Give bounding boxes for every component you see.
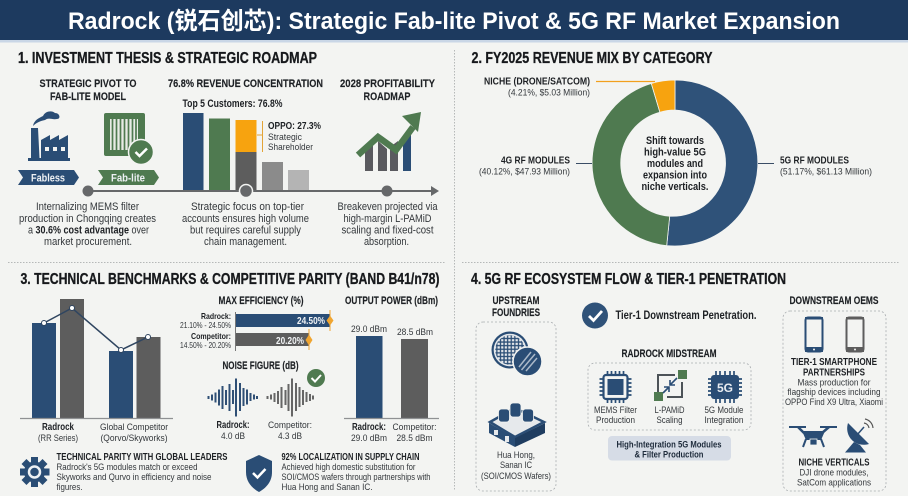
chart: noise figure: NOISE FIGURE (dB) [222,360,299,372]
chart: noise figure: 4.0 dB [221,431,245,442]
column: Radrock midstream [588,348,751,430]
heading: section 3: 3. TECHNICAL BENCHMARKS & COMPETITIVE PARITY (BAND B41/n78) [20,271,440,288]
label: niche: (4.21%, $5.03 Million) [508,88,590,98]
chart: noise figure: 4.3 dB [278,431,302,442]
chart: max efficiency: 21.10% - 24.50% [180,321,231,330]
donut chart [592,80,758,246]
column: downstream OEMs: DJI drone modules, [800,468,868,478]
callout: tier-1 penetration [582,302,756,328]
icon: factory [28,111,70,161]
callout: technical parity [56,452,228,493]
callout: OPPO share [257,121,321,153]
donut centre text: modules and [647,158,703,170]
column: Radrock midstream: Integration [704,415,744,426]
title banner [0,0,908,40]
subheading: profitability roadmap [340,78,436,103]
chart: max efficiency: 24.50% [297,316,325,327]
subheading: profitability roadmap: ROADMAP [364,91,410,103]
icon: packaged components [489,403,545,447]
text: fab-lite cost advantage: production in Chongqing creates [19,213,156,225]
icon: L-PAMiD scaling [654,370,687,401]
text: customer focus: Strategic focus on top-tier [191,201,304,213]
segment: 5G [667,80,758,246]
column: downstream OEMs: OPPO Find X9 Ultra, Xiaomi [785,397,883,408]
column: downstream OEMs: flagship devices including [788,387,880,398]
panel: investment thesis and roadmap [18,50,439,248]
column: upstream foundries: FOUNDRIES [492,307,540,319]
callout: tier-1 penetration: Tier-1 Downstream Penetration. [616,310,756,322]
icon: profitability growth arrow [358,112,421,171]
bar and line chart: Radrock vs competitor [20,299,173,444]
chart: output power: 29.0 dBm [351,433,387,444]
panel: revenue mix [472,50,872,246]
heading: section 2: 2. FY2025 REVENUE MIX BY CATEGORY [472,50,713,67]
subheading: strategic pivot: STRATEGIC PIVOT TO [40,78,137,90]
chart: noise figure: Competitor: [268,420,312,431]
donut centre text: niche verticals. [642,181,708,193]
callout: OPPO share: Strategic [268,132,302,143]
icon: 5G chip [708,371,742,403]
chart: output power: OUTPUT POWER (dBm) [345,295,438,307]
chart: output power: 29.0 dBm [351,324,387,335]
icon: gray phone [846,317,864,352]
column: Radrock midstream: RADROCK MIDSTREAM [622,348,716,360]
bar and line chart: Radrock vs competitor: (Qorvo/Skyworks) [100,433,168,444]
subheading: strategic pivot: FAB-LITE MODEL [50,91,126,103]
bar chart: customer concentration [183,113,309,190]
box: high-integration production: High-Integration 5G Modules [616,440,722,450]
panel: technical benchmarks [20,271,440,493]
text: customer focus [182,201,309,248]
label: top 5 customers: Top 5 Customers: 76.8% [182,98,283,110]
text: fab-lite cost advantage [19,201,156,248]
text: breakeven: Breakeven projected via [338,201,438,213]
subheading: strategic pivot [40,78,137,103]
label: 5G: 5G RF MODULES [780,156,849,166]
callout: technical parity: figures. [56,482,82,493]
donut centre text: high-value 5G [644,146,706,158]
callout: technical parity: TECHNICAL PARITY WITH GLOBAL LEADERS [56,452,228,463]
label: fabless chevron: Fabless [31,172,65,184]
column: Radrock midstream: Production [596,415,635,426]
chart: max efficiency [180,295,334,351]
callout: technical parity: Radrock's 5G modules match or exceed [56,462,198,473]
text: breakeven: scaling and fixed-cost [342,224,434,236]
column: Radrock midstream: L-PAMiD [654,405,685,416]
chart: max efficiency: 20.20% [276,336,304,347]
chart: noise figure: Radrock: [216,420,250,431]
column: Radrock midstream: MEMS Filter [594,405,637,416]
chart: output power: Competitor: [392,422,436,433]
text: breakeven: high-margin L-PAMiD [344,213,432,225]
callout: localization [282,452,430,493]
text: customer focus: but requires careful supply [190,224,301,236]
chart: output power: 28.5 dBm [397,327,433,338]
column: downstream OEMs: SatCom applications [797,478,871,488]
icon: 5G chip: 5G [717,381,733,395]
label: fab-lite chevron [98,170,159,185]
icon: drone [789,427,837,447]
column: upstream foundries: (SOI/CMOS Wafers) [481,471,551,482]
icon: fab-lite chip with check [104,113,154,164]
callout: technical parity: Skyworks and Qurvo in efficiency and noise [56,472,212,483]
icon: gear [20,457,50,487]
chart: max efficiency: MAX EFFICIENCY (%) [218,295,304,307]
column: downstream OEMs: Mass production for [798,378,870,388]
subheading: revenue concentration: 76.8% REVENUE CONCENTRATION [168,78,323,90]
box: high-integration production: & Filter Production [634,450,704,460]
column: downstream OEMs: DOWNSTREAM OEMS [790,295,878,307]
icon: navy phone [805,317,823,352]
timeline arrow [82,184,439,198]
column: downstream OEMs: TIER-1 SMARTPHONE [791,357,877,368]
icon: competitor waveform [268,378,313,416]
callout: localization: Hua Hong and Sanan IC. [282,482,372,493]
column: Radrock midstream: Scaling [656,415,682,426]
donut centre text: Shift towards [646,135,704,147]
label: 4G: 4G RF MODULES [501,156,570,166]
chart: output power [344,295,439,444]
label: fabless chevron [18,170,79,185]
icon: satellite dish [845,419,873,452]
label: niche: NICHE (DRONE/SATCOM) [484,76,590,88]
column: upstream foundries: Sanan IC [500,460,532,471]
subheading: profitability roadmap: 2028 PROFITABILITY [340,78,436,90]
donut centre text: expansion into [643,170,707,182]
text: fab-lite cost advantage: Internalizing MEMS filter [36,201,139,213]
icon: wafers [492,332,542,376]
label: niche [484,76,655,98]
segment: 4G [592,84,670,246]
bar and line chart: Radrock vs competitor: Global Competitor [100,422,168,433]
label: fab-lite chevron: Fab-lite [111,172,145,184]
panel: ecosystem flow [471,271,886,491]
heading: section 1: 1. INVESTMENT THESIS & STRATEGIC ROADMAP [18,50,317,67]
icon: MEMS chip [600,371,632,403]
chart: output power: Radrock: [352,422,386,433]
text: fab-lite cost advantage: market procurement. [44,236,132,248]
callout: localization: 92% LOCALIZATION IN SUPPLY CHAIN [282,452,420,463]
label: 5G: (51.17%, $61.13 Million) [780,166,872,178]
callout: OPPO share: OPPO: 27.3% [268,121,321,132]
column: upstream foundries: UPSTREAM [492,295,540,307]
label: 4G [479,156,592,178]
donut centre text [642,135,708,193]
segment: niche [651,80,675,112]
box: high-integration production [608,436,731,460]
chart: max efficiency: Competitor: [191,331,231,341]
column: downstream OEMs: NICHE VERTICALS [798,458,870,468]
text: customer focus: chain management. [204,236,287,248]
column: downstream OEMs [783,295,886,491]
chart: noise figure [208,360,325,442]
icon: shield with check [246,455,272,492]
column: downstream OEMs: PARTNERSHIPS [803,368,865,378]
title banner: Radrock (锐石创芯): Strategic Fab-lite Pivot & 5G RF Market Expansion [68,8,840,35]
text: breakeven: absorption. [364,236,409,248]
icon: check badge [307,369,325,387]
text: breakeven [338,201,438,248]
chart: max efficiency: Radrock: [201,311,231,321]
callout: localization: Achieved high domestic substitution for [282,462,416,473]
icon: Radrock waveform [208,378,257,416]
heading: section 4: 4. 5G RF ECOSYSTEM FLOW & TIER-1 PENETRATION [471,271,786,288]
callout: localization: SOI/CMOS wafers through partnerships with [282,472,430,483]
column: upstream foundries [476,295,556,491]
chart: output power: 28.5 dBm [396,433,433,444]
label: 4G: (40.12%, $47.93 Million) [479,166,570,178]
chart: max efficiency: 14.50% - 20.20% [180,341,231,350]
text: customer focus: accounts ensures high volume [182,213,309,225]
text: fab-lite cost advantage: a 30.6% cost advantage over [28,224,149,236]
label: 5G [758,156,872,178]
column: Radrock midstream: 5G Module [704,405,744,416]
bar and line chart: Radrock vs competitor: Radrock [42,422,74,433]
bar and line chart: Radrock vs competitor: (RR Series) [38,433,78,444]
column: upstream foundries: Hua Hong, [497,450,535,461]
callout: OPPO share: Shareholder [268,142,313,153]
